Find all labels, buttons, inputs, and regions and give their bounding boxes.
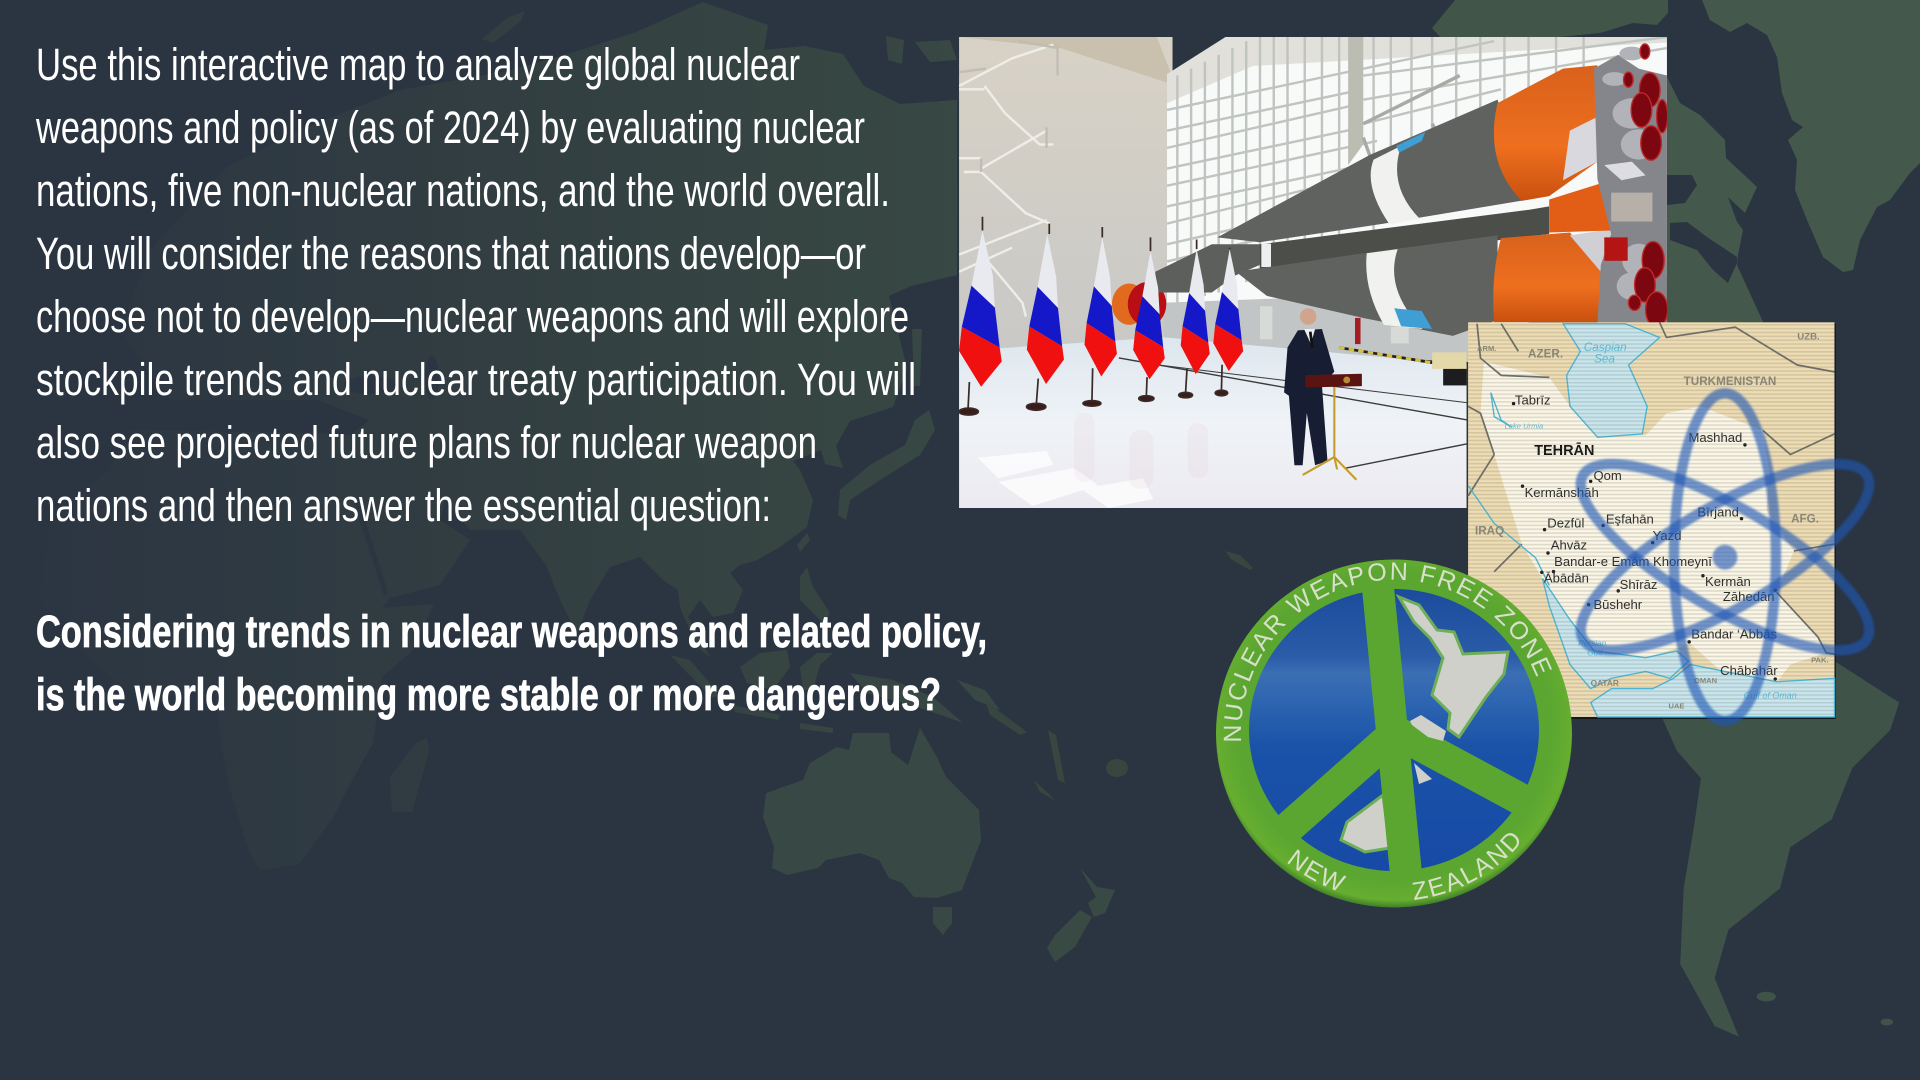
- badge: Nuclear Weapon Free Zone New Zealand: NEW: [1288, 849, 1346, 890]
- map: Tasmania: [933, 907, 952, 935]
- map drop shadow: [1469, 324, 1836, 719]
- back wall: [1164, 289, 1529, 365]
- intro text: You will consider the reasons that nations develop—or: [36, 228, 866, 279]
- map labels: Ābādān: [1544, 571, 1589, 586]
- map labels: Bandar ‘Abbās: [1691, 626, 1777, 641]
- map labels: Caspian: [1584, 341, 1627, 354]
- scan lines: [1468, 322, 1834, 717]
- badge: Nuclear Weapon Free Zone New Zealand: [1216, 560, 1572, 908]
- hangar windows: [1167, 37, 1667, 310]
- essential question: [36, 606, 987, 720]
- stairs: [959, 41, 1058, 317]
- intro text: Use this interactive map to analyze global nuclear: [36, 39, 800, 90]
- map labels: Gulf: [1587, 649, 1603, 658]
- map labels: PAK.: [1811, 656, 1829, 665]
- Gulf of Oman: [1591, 665, 1834, 717]
- map labels: Ahvāz: [1551, 538, 1587, 553]
- intro text: [35, 39, 916, 531]
- speaker at podium: [1284, 308, 1362, 480]
- map labels: Chābahār: [1720, 663, 1778, 678]
- intro text: weapons and policy (as of 2024) by evaluating nuclear: [35, 102, 865, 153]
- Caspian Sea: [1563, 324, 1660, 437]
- map labels: Sea: [1594, 352, 1615, 365]
- map labels: Eşfahān: [1606, 511, 1654, 526]
- barrier tape: [1339, 348, 1467, 385]
- map: North America: [1660, 77, 1763, 400]
- badge: Nuclear Weapon Free Zone New Zealand: ZEALAND: [1412, 833, 1520, 900]
- map: inland seas: [344, 356, 439, 596]
- far booster: [1155, 244, 1263, 292]
- map labels: ARM.: [1477, 344, 1496, 353]
- map borders and rivers: [1468, 322, 1834, 654]
- essential question: Considering trends in nuclear weapons and related policy,: [36, 606, 987, 657]
- map labels: AZER.: [1528, 347, 1563, 360]
- map labels: Lake Urmia: [1505, 421, 1543, 430]
- peace symbol: [1288, 588, 1526, 874]
- map labels: QATAR: [1591, 679, 1619, 688]
- map labels: TURKMENISTAN: [1684, 375, 1776, 388]
- badge lettering: NUCLEAR WEAPON FREE ZONE: [1224, 562, 1552, 741]
- intro text: also see projected future plans for nuclear weapon: [36, 417, 817, 468]
- Iran land: [1480, 362, 1826, 682]
- hangar wall: [959, 37, 1173, 368]
- map labels: TEHRĀN: [1534, 442, 1594, 459]
- map: Eurasia and Africa: [40, 2, 1000, 870]
- map: Pacific islands: [985, 551, 1253, 800]
- map labels: Gulf of Oman: [1744, 690, 1797, 700]
- map labels: Shīrāz: [1620, 577, 1657, 592]
- center engine section: [1549, 182, 1611, 233]
- map labels: Yazd: [1653, 528, 1682, 543]
- North Island: [1399, 597, 1508, 737]
- photo: rocket hangar with flags and speaker: [959, 37, 1667, 508]
- map labels: IRAQ: [1475, 524, 1504, 537]
- map: Australia: [763, 728, 981, 898]
- icon: blue atom: [1558, 393, 1892, 721]
- map labels: Bīrjand: [1697, 505, 1739, 520]
- map labels: [1475, 332, 1829, 711]
- map labels: Tabrīz: [1515, 392, 1551, 407]
- upper booster: [1217, 65, 1597, 242]
- flagpoles: [959, 217, 1230, 415]
- map labels: Dezfūl: [1547, 516, 1584, 531]
- Persian Gulf: [1542, 579, 1688, 689]
- lower booster: [1236, 227, 1625, 336]
- intro text: nations and then answer the essential question:: [36, 480, 771, 531]
- map labels: UAE: [1669, 702, 1684, 711]
- map: South America: [1663, 661, 1899, 1036]
- Cook Strait islets: [1410, 715, 1446, 784]
- map photo of Iran: [1468, 322, 1836, 719]
- badge blue face: [1249, 589, 1539, 871]
- map labels: AFG.: [1791, 513, 1819, 526]
- map labels: Zāhedān: [1723, 589, 1775, 604]
- map labels: UZB.: [1797, 332, 1820, 343]
- map labels: Persian: [1578, 639, 1607, 648]
- badge rim: [1216, 560, 1572, 908]
- Russian flags: [959, 230, 1243, 387]
- South Island: [1341, 795, 1390, 852]
- far rocket engine: [1112, 282, 1166, 326]
- rocket nozzles: [1594, 44, 1668, 328]
- intro text: nations, five non-nuclear nations, and the world overall.: [36, 165, 890, 216]
- map labels: Būshehr: [1593, 597, 1643, 612]
- map: New Zealand: [1047, 868, 1115, 962]
- map labels: Kermānshāh: [1525, 485, 1599, 500]
- floor: [959, 337, 1467, 508]
- map labels: OMAN: [1694, 676, 1717, 685]
- map labels: Kermān: [1705, 574, 1751, 589]
- map labels: Mashhad: [1688, 430, 1742, 445]
- map: Greenland: [1702, 0, 1920, 272]
- essential question: is the world becoming more stable or more dangerous?: [36, 669, 941, 720]
- intro text: stockpile trends and nuclear treaty participation. You will: [36, 354, 916, 405]
- intro text: choose not to develop—nuclear weapons and will explore: [36, 291, 909, 342]
- middle booster: [1260, 206, 1549, 270]
- map labels: Qom: [1593, 468, 1622, 483]
- map labels: Bandar-e Emām Khomeynī: [1554, 554, 1712, 569]
- map: Arctic islands: [1432, 0, 1668, 37]
